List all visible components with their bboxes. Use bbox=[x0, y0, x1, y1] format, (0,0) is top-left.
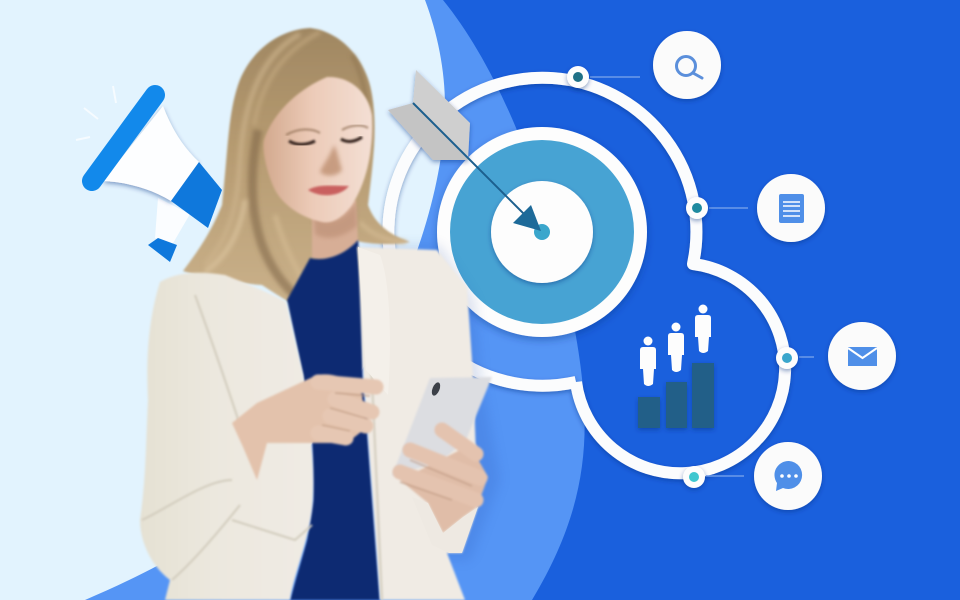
woman: holding hand bbox=[400, 430, 488, 533]
arrow: fletching bbox=[388, 70, 470, 160]
woman: lips bbox=[308, 186, 349, 195]
woman: holding hand creases bbox=[400, 460, 472, 500]
woman: neck bbox=[312, 200, 358, 259]
icon: search badge bbox=[653, 31, 721, 99]
woman: palm and wrist bbox=[400, 445, 488, 533]
woman: lapel bbox=[358, 247, 390, 395]
chart: person 3 bbox=[695, 304, 711, 353]
chart: bars bbox=[638, 363, 714, 428]
woman: jacket left bbox=[140, 273, 313, 600]
woman: phone bbox=[392, 377, 492, 476]
woman: soft shadow bbox=[350, 245, 500, 560]
megaphone icon bbox=[76, 86, 222, 262]
megaphone: rim bbox=[92, 95, 155, 181]
arrow: shaft bbox=[413, 103, 538, 228]
target bbox=[437, 127, 647, 337]
woman: neck shadow bbox=[314, 202, 357, 238]
ring node: mail bbox=[776, 347, 798, 369]
woman: phone camera bbox=[430, 381, 442, 397]
target: inner white disc bbox=[491, 181, 593, 283]
ring node: search bbox=[567, 66, 589, 88]
woman: pointing fingers bbox=[318, 382, 376, 438]
ring node: document bbox=[686, 197, 708, 219]
woman: nose bbox=[320, 145, 342, 176]
megaphone: handle bbox=[155, 198, 190, 245]
woman: brows bbox=[286, 126, 368, 135]
chart: person 2 bbox=[668, 322, 684, 372]
woman: jacket fold lines bbox=[142, 247, 382, 600]
arrow: head bbox=[513, 205, 541, 231]
background: deep blue swoosh bbox=[443, 0, 960, 600]
woman: back hair bbox=[183, 28, 410, 312]
chart: audience growth bbox=[638, 304, 714, 428]
chart: person 1 bbox=[640, 336, 656, 386]
icon: chat badge bbox=[754, 442, 822, 510]
woman: holding fingers bbox=[400, 430, 480, 500]
woman: hair strands bbox=[205, 32, 406, 308]
target: blue band bbox=[450, 140, 634, 324]
white circuit ring bbox=[388, 78, 785, 473]
woman bbox=[140, 28, 500, 600]
woman: pointing hand bbox=[232, 374, 376, 480]
woman: eyes bbox=[289, 137, 362, 144]
icon: mail badge bbox=[828, 322, 896, 390]
icon: document badge bbox=[757, 174, 825, 242]
megaphone: sound lines bbox=[76, 86, 116, 140]
megaphone: back bbox=[171, 162, 222, 228]
woman: finger creases bbox=[322, 393, 370, 431]
woman: jacket right bbox=[358, 247, 478, 600]
woman: face bbox=[263, 77, 372, 222]
woman: navy top bbox=[287, 240, 380, 600]
ring node: chat bbox=[683, 466, 705, 488]
target: bullseye bbox=[534, 224, 550, 240]
woman: hand back and wrist bbox=[232, 374, 366, 480]
megaphone: foot bbox=[148, 238, 177, 262]
target: outer white ring bbox=[437, 127, 647, 337]
connector lines bbox=[590, 77, 814, 476]
woman: jacket cuff bbox=[412, 497, 478, 553]
megaphone: horn bbox=[103, 106, 199, 201]
arrow bbox=[388, 70, 541, 231]
